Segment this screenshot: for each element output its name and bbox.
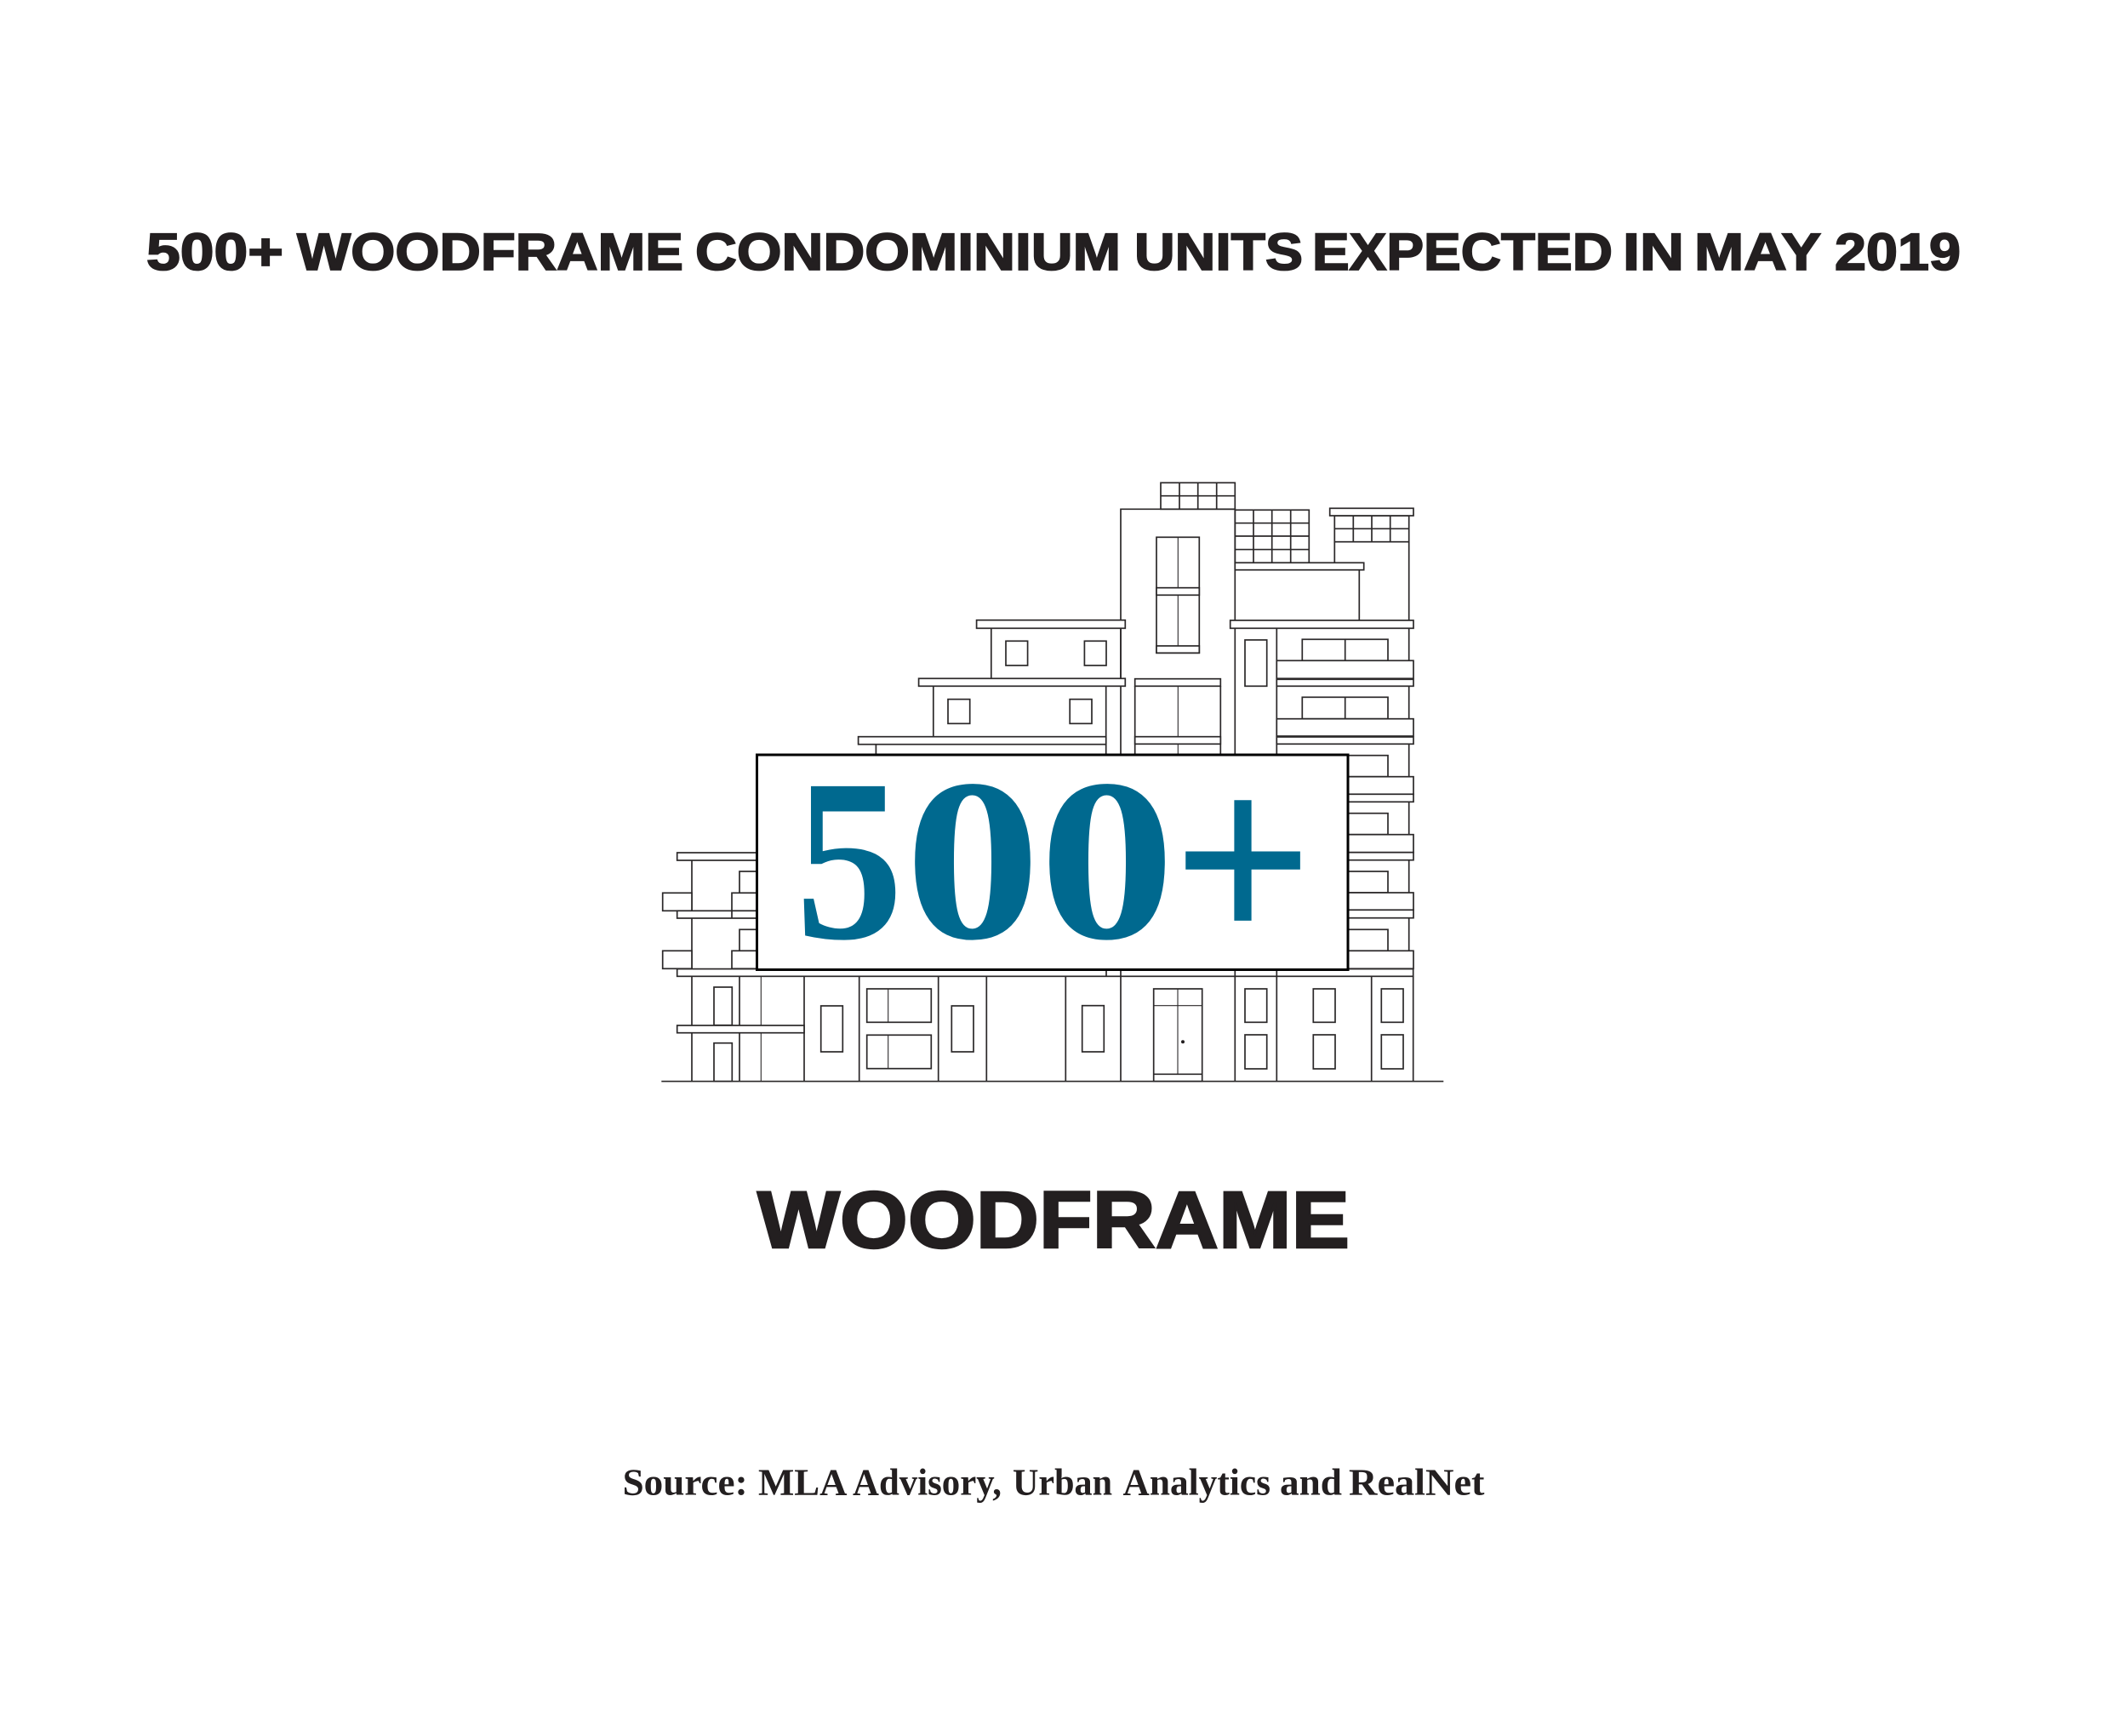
source line: Urban [1013,1462,1112,1503]
number panel [757,716,1348,1002]
ground line [661,1081,1443,1082]
ground floor windows [677,987,1403,1082]
title: WOODFRAME [297,223,683,282]
big number 500+: + [1173,716,1313,1002]
entrance door [1154,989,1202,1082]
title: UNITS [1134,223,1303,282]
rooftop solar grid: tower [1161,483,1235,509]
panel box [757,755,1348,970]
ground floor walls [677,969,1413,1082]
title: EXPECTED [1312,223,1613,282]
source line [623,1462,1485,1503]
title: MAY [1694,223,1821,282]
lower left wing [663,853,762,969]
central glazed bay [1135,679,1220,756]
big number 500+ [795,716,1313,1002]
rooftop solar grid: middle [1235,510,1309,562]
title [146,223,1961,282]
label: WOODFRAME: WOODFRAME [757,1175,1350,1265]
title: CONDOMINIUM [695,223,1121,282]
big number 500+: 0 [905,732,1041,988]
source line: and [1280,1462,1342,1503]
source line: Advisory, [853,1462,1002,1503]
title: 2019 [1835,223,1961,282]
upper right penthouse [1231,562,1413,686]
stepped terraces left of tower [859,620,1125,756]
source line: Analytics [1123,1462,1270,1503]
source line: MLA [758,1462,848,1503]
big number 500+: 5 [795,732,904,988]
building illustration [661,483,1443,1082]
big number 500+: 0 [1039,732,1175,988]
right balconies [1276,639,1413,968]
source line: Source: [623,1462,748,1503]
rooftop solar grid: right [1330,508,1413,562]
title: IN [1623,223,1684,282]
source line: RealNet [1349,1462,1485,1503]
title: 500+ [146,223,283,282]
central tower [1106,509,1409,969]
